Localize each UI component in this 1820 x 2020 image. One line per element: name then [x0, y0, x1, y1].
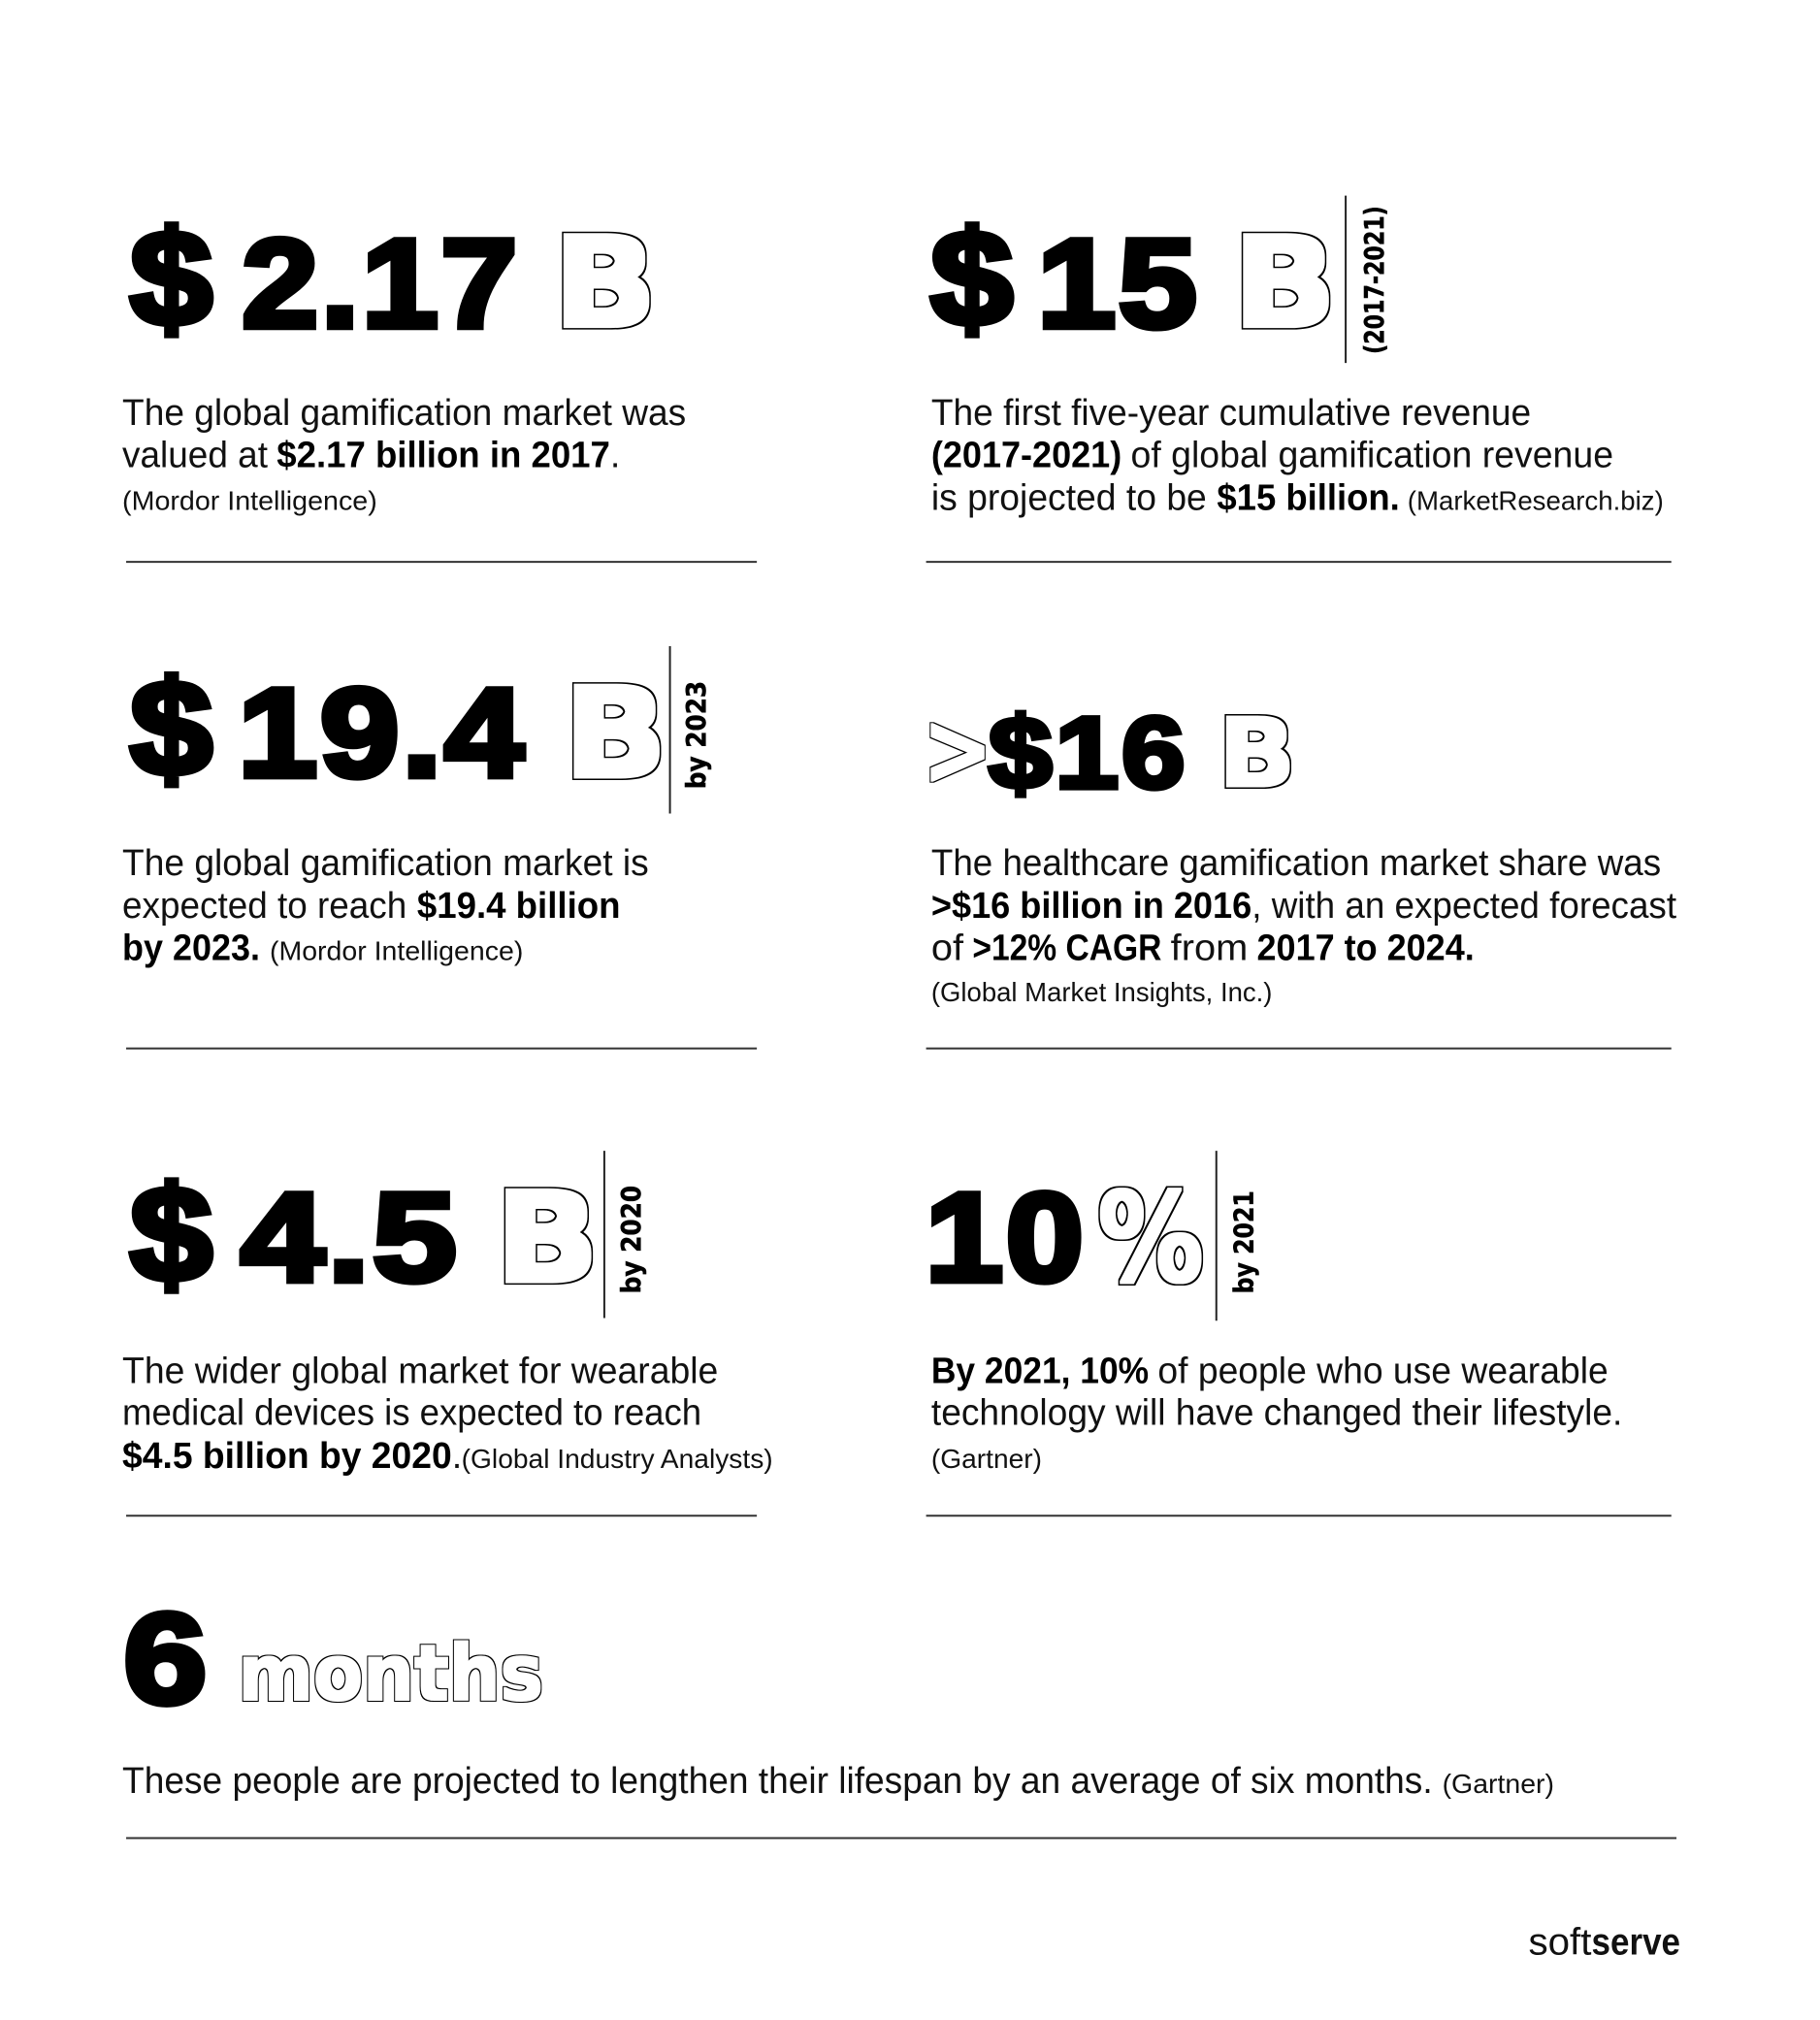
big number: $2.17 [130, 203, 520, 354]
description text: , with an expected forecast [1251, 886, 1677, 927]
big number: $15: 15 [1037, 212, 1200, 354]
description text: $2.17 billion in 2017 [276, 436, 610, 476]
vertical divider [1216, 1151, 1218, 1320]
description text: . [452, 1436, 462, 1477]
big number: $4.5: $ [130, 1158, 212, 1310]
description text: The healthcare gamification market share was [931, 843, 1661, 884]
description text: is projected to be [931, 477, 1207, 518]
outlined letter B: B [564, 663, 666, 806]
outlined word: months: months [238, 1628, 543, 1718]
description text: (Gartner) [1443, 1769, 1554, 1799]
description text: expected to reach [122, 886, 406, 927]
vertical divider [1345, 196, 1347, 363]
outlined letter B: B [554, 212, 657, 356]
description text: medical devices is expected to reach [122, 1393, 701, 1434]
description text: (Gartner) [931, 1444, 1042, 1474]
big number: 6: 6 [123, 1587, 210, 1731]
big number: $19.4 [130, 653, 527, 804]
big number: $19.4: 19.4 [238, 662, 527, 803]
description text: The global gamification market is [122, 843, 649, 884]
big number: $2.17: 2.17 [242, 212, 520, 354]
big number: $16: $16 [989, 697, 1188, 810]
panel: >$16 B healthcare [923, 692, 1677, 1007]
panel: $15 B cumulative revenue [930, 196, 1664, 518]
description text: The global gamification market was [122, 393, 686, 434]
big number: $15: $ [930, 203, 1013, 354]
rotated label: by 2020: by 2020 [617, 1186, 647, 1293]
big number: $15 [930, 203, 1200, 354]
description text: The wider global market for wearable [122, 1352, 718, 1392]
outlined greater-than sign: > [923, 692, 992, 808]
description text: of global gamification revenue [1131, 436, 1613, 476]
description text: $4.5 billion by 2020 [122, 1436, 452, 1477]
description text: $19.4 billion [417, 886, 620, 927]
description text: of [931, 929, 964, 969]
vertical divider [669, 646, 671, 813]
description text: by 2023. [122, 929, 260, 969]
rotated label: (2017-2021): (2017-2021) [1360, 206, 1390, 354]
description text: from [1171, 929, 1248, 969]
vertical divider [603, 1151, 605, 1319]
big number: 10: 10 [926, 1166, 1087, 1308]
description text: of people who use wearable [1157, 1352, 1609, 1392]
description text: These people are projected to lengthen their lifespan by an average of six months. [122, 1761, 1433, 1802]
logo: softserve: serve [1591, 1922, 1680, 1964]
panel: $4.5 B by 2020 [122, 1151, 773, 1477]
logo: softserve [1528, 1922, 1680, 1964]
description text: (Global Industry Analysts) [462, 1444, 773, 1474]
big number: $2.17: $ [130, 203, 212, 354]
description text: (Global Market Insights, Inc.) [931, 977, 1272, 1007]
description text: The first five-year cumulative revenue [931, 393, 1531, 434]
panel: $19.4 B by 2023 [122, 646, 712, 969]
description text: By 2021, 10% [931, 1352, 1149, 1392]
description text [122, 843, 649, 969]
big number: $19.4: $ [130, 653, 212, 804]
rotated label: by 2023: by 2023 [682, 681, 712, 789]
outlined percent sign: % [1098, 1167, 1203, 1311]
description text: (MarketResearch.biz) [1408, 485, 1664, 515]
outlined letter B: B [1219, 699, 1295, 808]
description text [931, 1352, 1622, 1474]
description text: (Mordor Intelligence) [122, 485, 377, 515]
big number: $4.5: 4.5 [241, 1166, 460, 1308]
description text [122, 393, 686, 515]
description text: (Mordor Intelligence) [270, 936, 523, 966]
description text: valued at [122, 436, 268, 476]
outlined letter B: B [496, 1167, 599, 1311]
big number: $4.5 [130, 1158, 460, 1310]
rotated label: by 2021: by 2021 [1230, 1190, 1260, 1293]
logo: softserve: soft [1528, 1922, 1592, 1964]
description text: 2017 to 2024. [1257, 929, 1475, 969]
description text: >$16 billion in 2016 [931, 886, 1251, 927]
panel: 6 months [122, 1587, 1554, 1802]
panel: $2.17 B market value [122, 203, 686, 515]
description text [931, 393, 1664, 518]
description text: >12% CAGR [972, 929, 1161, 969]
description text: technology will have changed their lifestyle. [931, 1393, 1622, 1434]
description text: (2017-2021) [931, 436, 1121, 476]
description text: $15 billion. [1217, 477, 1400, 518]
description text: . [610, 436, 620, 476]
description text [122, 1352, 773, 1477]
description text [931, 843, 1677, 1007]
panel: 10% by 2021 [926, 1151, 1622, 1474]
outlined letter B: B [1233, 212, 1336, 356]
